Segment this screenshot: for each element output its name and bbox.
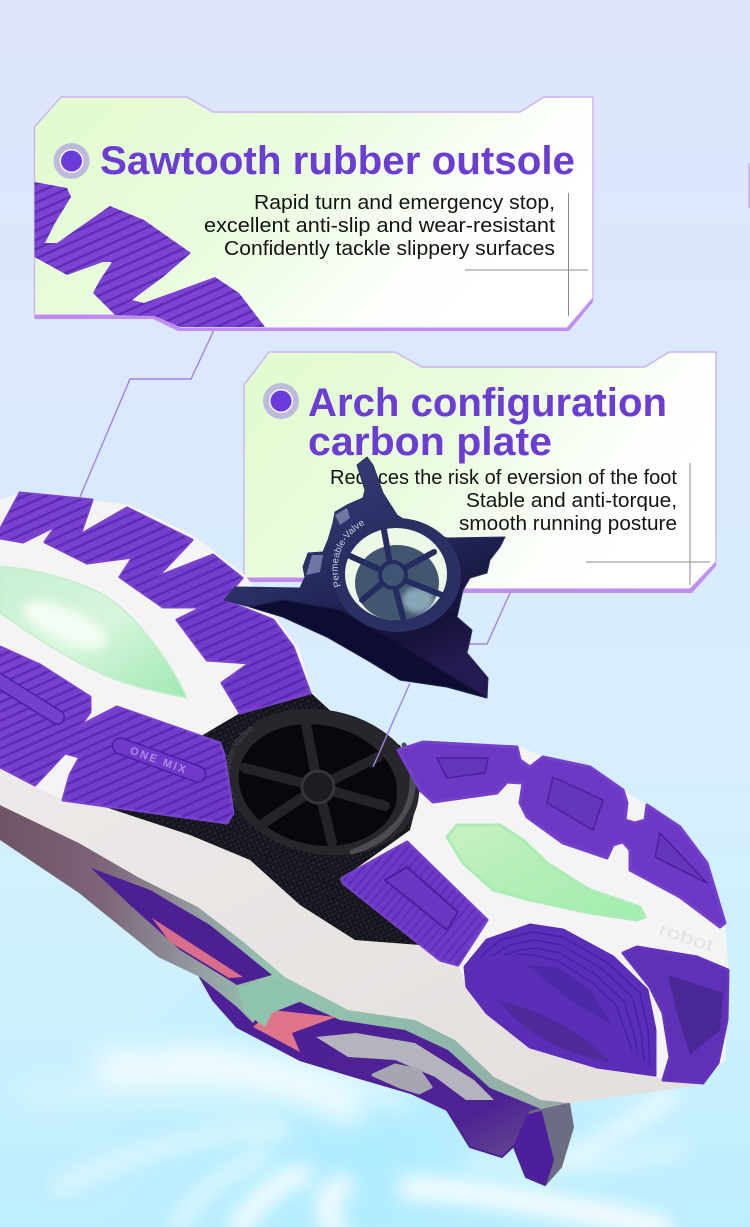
panel bottom accent xyxy=(34,298,593,331)
black arch shank xyxy=(90,692,420,945)
plate underside shadow xyxy=(250,600,487,698)
heading: carbon plate xyxy=(308,420,552,464)
plate highlights xyxy=(306,508,350,575)
carbon plate xyxy=(224,456,506,698)
dark heel patch xyxy=(668,975,723,1055)
forefoot green cushion pod xyxy=(0,566,187,698)
logo capsule xyxy=(110,736,208,784)
bullet marker xyxy=(54,143,90,179)
wheel face xyxy=(227,710,409,860)
description text: smooth running posture xyxy=(459,512,677,535)
side window xyxy=(91,868,272,985)
wheel rim xyxy=(211,691,433,873)
upper streaks xyxy=(30,1052,400,1120)
wheel hub xyxy=(380,562,406,588)
description text xyxy=(330,466,677,535)
valve label: Permeable-Valve xyxy=(332,520,364,588)
forefoot lower lug xyxy=(0,647,233,823)
description text: Reduces the risk of eversion of the foot xyxy=(330,466,677,489)
connector line: carbon plate callout xyxy=(467,593,510,644)
heel side lug xyxy=(623,947,728,1083)
pink strip xyxy=(152,918,243,978)
dotted capsule xyxy=(0,667,67,727)
green mesh xyxy=(237,978,304,1027)
description text: Stable and anti-torque, xyxy=(466,489,677,512)
wheel rim highlight xyxy=(352,745,413,852)
heel tab xyxy=(514,1103,573,1185)
plate body xyxy=(224,457,505,698)
panel frame xyxy=(244,352,716,589)
shaded side foam xyxy=(0,770,703,1103)
concentric ribs xyxy=(480,932,650,1068)
panel: arch configuration carbon plate xyxy=(244,352,716,593)
wheel spokes xyxy=(350,530,442,618)
forefoot sawtooth lug xyxy=(0,493,310,713)
wheel hub xyxy=(302,771,334,803)
white outsole base xyxy=(0,493,729,1103)
swirl centre tint xyxy=(0,900,750,1227)
connector line: below carbon plate xyxy=(373,683,410,767)
running shoe xyxy=(0,492,730,1186)
pink mesh xyxy=(253,1010,336,1052)
bullet marker xyxy=(263,383,299,419)
right edge tab xyxy=(748,163,750,208)
connector line: outsole callout xyxy=(80,330,214,497)
wheel label: Permeable-Valve xyxy=(226,726,253,801)
translucent midsole sidewall xyxy=(0,805,569,1109)
panel frame xyxy=(34,97,593,328)
outsole lug close-up xyxy=(34,182,265,327)
crosshair mark xyxy=(586,463,710,585)
heading xyxy=(308,381,667,464)
lower streaks xyxy=(60,1095,680,1227)
tread pads xyxy=(437,758,707,883)
dark logo shade xyxy=(498,1000,610,1062)
description text: Confidently tackle slippery surfaces xyxy=(224,237,555,260)
heel green cushion pod xyxy=(447,825,645,920)
tread pad xyxy=(385,867,458,930)
window fabric xyxy=(91,868,272,985)
panel bottom accent xyxy=(244,562,716,593)
heel outer lug xyxy=(398,742,725,927)
heading: Arch configuration xyxy=(308,381,667,425)
upper fabric xyxy=(200,977,569,1157)
heel tab webbing xyxy=(514,1112,553,1185)
description text xyxy=(204,191,555,260)
grey logo pill xyxy=(373,1065,431,1093)
description text: excellent anti-slip and wear-resistant xyxy=(204,214,555,237)
wheel window xyxy=(345,528,447,620)
heading: Sawtooth rubber outsole xyxy=(100,139,575,183)
heel inner lug xyxy=(342,842,487,965)
panel: sawtooth rubber outsole xyxy=(34,97,593,331)
crosshair mark xyxy=(465,193,588,316)
sole wheel valve xyxy=(226,708,419,856)
wheel spokes xyxy=(245,724,385,842)
wheel rim xyxy=(333,518,461,632)
logo capsule: ONE MIX xyxy=(128,745,189,777)
white wind swirl xyxy=(30,1052,680,1227)
description text: Rapid turn and emergency stop, xyxy=(254,191,555,214)
heel strike lug xyxy=(465,925,655,1075)
sole brand mark: robot xyxy=(657,920,716,955)
shoe upper xyxy=(200,977,573,1185)
dotted centre patch xyxy=(527,965,612,1025)
grey reflective arc xyxy=(316,1033,494,1100)
